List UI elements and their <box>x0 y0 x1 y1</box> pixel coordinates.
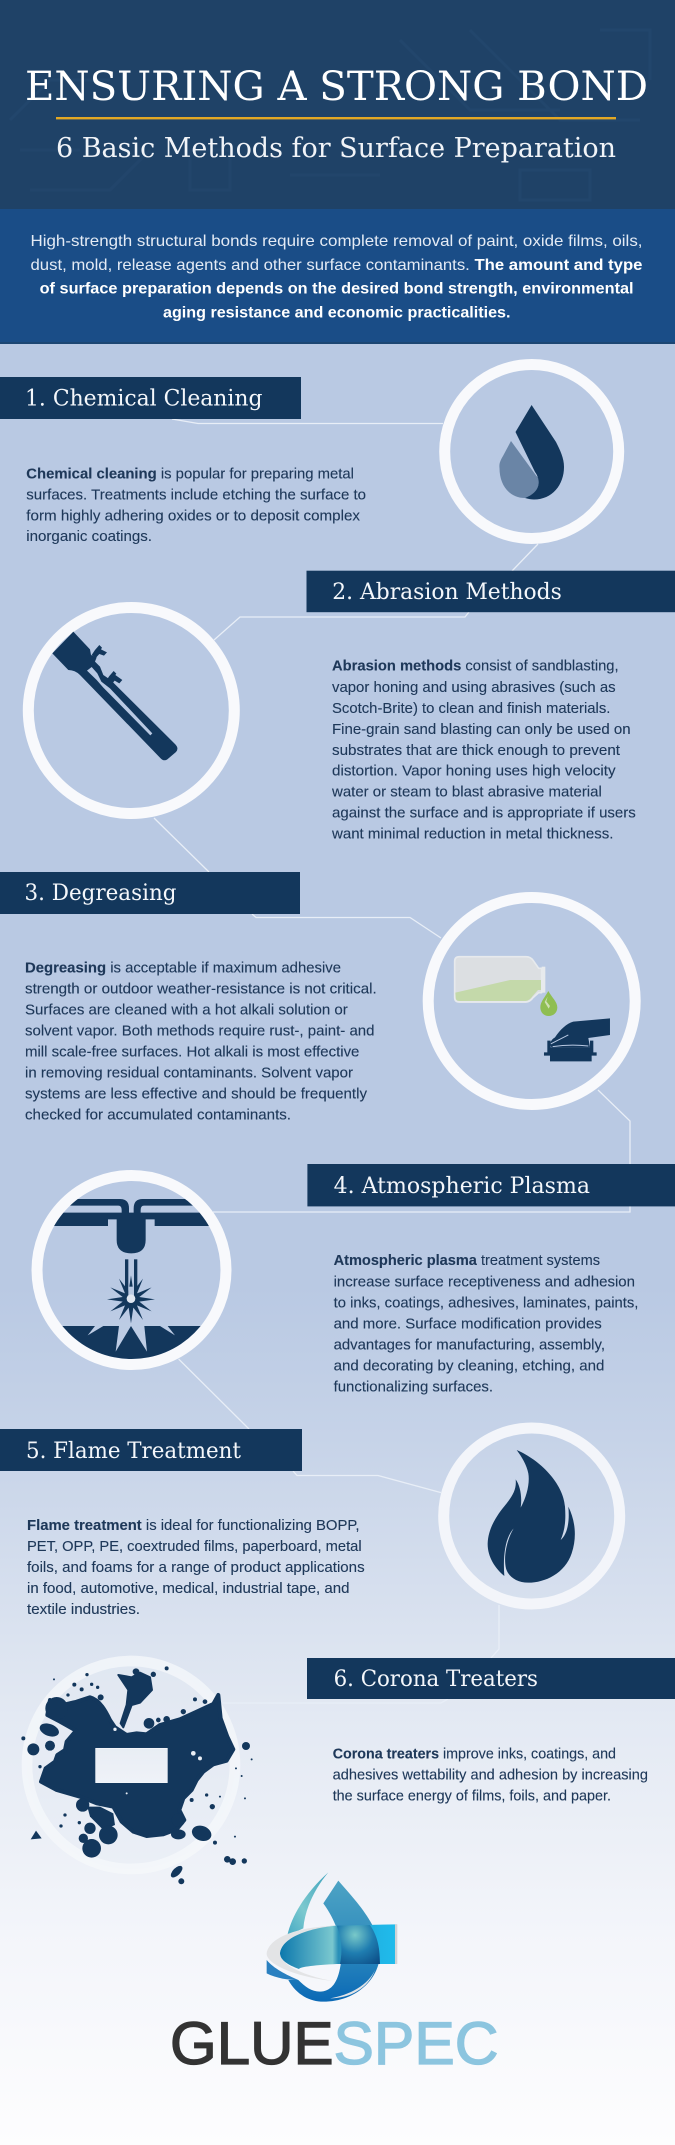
circle: atmospheric plasma <box>37 1176 226 1364</box>
body text: degreasing: systems are less effective and should be frequently <box>25 1087 368 1103</box>
section 4: atmospheric plasma <box>37 1164 675 1395</box>
header banner <box>0 0 675 209</box>
body text: flame treatment: textile industries. <box>27 1602 140 1618</box>
title: ENSURING A STRONG BOND <box>25 64 648 110</box>
section 5: flame treatment <box>0 1428 620 1618</box>
intro text <box>30 233 643 322</box>
body text: atmospheric plasma: and more. Surface modification provides <box>334 1316 602 1332</box>
body text: flame treatment: PET, OPP, PE, coextruded films, paperboard, metal <box>27 1539 362 1555</box>
logo mark <box>267 1872 397 2002</box>
body text: flame treatment: foils, and foams for a range of product applications <box>27 1560 365 1576</box>
body text: abrasion methods: substrates that are thick enough to prevent <box>332 743 620 759</box>
body text: degreasing: Surfaces are cleaned with a hot alkali solution or <box>25 1002 348 1018</box>
subtitle: 6 Basic Methods for Surface Preparation <box>56 133 616 164</box>
body text: flame treatment <box>27 1518 365 1618</box>
logo: gluespec: SPEC <box>334 2010 498 2077</box>
body text: degreasing: solvent vapor. Both methods require rust-, paint- and <box>25 1024 374 1040</box>
section 1: chemical cleaning <box>0 364 619 545</box>
heading: flame treatment: 5. Flame Treatment <box>26 1439 241 1464</box>
intro text: aging resistance and economic practicalities. <box>163 304 510 322</box>
circle: flame treatment <box>444 1428 620 1604</box>
body text: chemical cleaning <box>26 466 366 545</box>
circle: degreasing <box>428 898 635 1104</box>
connector lines <box>154 419 630 1703</box>
heading: degreasing: 3. Degreasing <box>24 881 176 906</box>
body text: abrasion methods: Scotch-Brite) to clean and finish materials. <box>332 701 610 717</box>
body text: flame treatment: in food, automotive, medical, industrial tape, and <box>27 1581 350 1597</box>
body text: corona treaters: Corona treaters improve inks, coatings, and <box>333 1746 616 1762</box>
body text: abrasion methods: want minimal reduction in metal thickness. <box>331 827 613 843</box>
body text: corona treaters: adhesives wettability and adhesion by increasing <box>333 1767 648 1783</box>
icon: sandblasting nozzle <box>52 632 177 760</box>
icon: bottle and hand wiping <box>455 957 610 1061</box>
body text: flame treatment: Flame treatment is ideal for functionalizing BOPP, <box>27 1518 360 1534</box>
body text: atmospheric plasma: functionalizing surfaces. <box>334 1379 493 1395</box>
heading: atmospheric plasma: 4. Atmospheric Plasma <box>334 1174 590 1199</box>
body text: atmospheric plasma: to inks, coatings, adhesives, laminates, paints, <box>334 1296 638 1312</box>
body text: corona treaters: the surface energy of films, foils, and paper. <box>333 1788 611 1804</box>
icon: flame <box>488 1450 575 1583</box>
body text: abrasion methods: Fine-grain sand blasting can only be used on <box>332 722 631 738</box>
body text: atmospheric plasma: increase surface receptiveness and adhesion <box>334 1274 635 1290</box>
intro band <box>0 209 675 344</box>
body text: atmospheric plasma: and decorating by cleaning, etching, and <box>334 1358 604 1374</box>
section 6: corona treaters <box>21 1658 675 1884</box>
body text: chemical cleaning: surfaces. Treatments include etching the surface to <box>26 487 366 503</box>
heading: corona treaters: 6. Corona Treaters <box>334 1667 538 1692</box>
body text: degreasing <box>25 960 377 1124</box>
body text: atmospheric plasma: Atmospheric plasma treatment systems <box>334 1253 600 1269</box>
circle: abrasion <box>28 608 234 814</box>
body text: abrasion methods: Abrasion methods consist of sandblasting, <box>332 659 619 675</box>
body text: atmospheric plasma: advantages for manufacturing, assembly, <box>334 1337 605 1353</box>
body text: atmospheric plasma <box>334 1253 638 1395</box>
body text: abrasion methods: against the surface and is appropriate if users <box>332 806 636 822</box>
logo: gluespec <box>170 1872 498 2077</box>
circle: chemical cleaning <box>445 364 619 538</box>
body text: chemical cleaning: Chemical cleaning is popular for preparing metal <box>26 466 354 482</box>
body text: abrasion methods <box>331 659 636 843</box>
section 3: degreasing <box>0 872 635 1124</box>
intro text: of surface preparation depends on the desired bond strength, environmental <box>40 280 634 298</box>
white label rectangle <box>96 1748 167 1783</box>
intro text: dust, mold, release agents and other surface contaminants. The amount and type <box>30 257 643 274</box>
heading: chemical cleaning: 1. Chemical Cleaning <box>25 386 262 412</box>
body text: chemical cleaning: form highly adhering oxides or to deposit complex <box>26 508 361 524</box>
body text: abrasion methods: distortion. Vapor honing uses high velocity <box>332 764 616 780</box>
logo wordmark: GLUE <box>170 2010 334 2077</box>
icon: liquid drop <box>499 405 564 500</box>
body text: degreasing: checked for accumulated contaminants. <box>25 1108 291 1124</box>
intro text: High-strength structural bonds require complete removal of paint, oxide films, oils, <box>30 233 642 250</box>
heading: abrasion methods: 2. Abrasion Methods <box>332 580 562 605</box>
section 2: abrasion methods <box>28 571 675 843</box>
body text: chemical cleaning: inorganic coatings. <box>26 529 152 545</box>
body text: abrasion methods: vapor honing and using abrasives (such as <box>332 680 616 696</box>
body text: degreasing: strength or outdoor weather-resistance is not critical. <box>25 982 377 998</box>
body text: degreasing: in removing residual contaminants. Solvent vapor <box>25 1066 353 1082</box>
icon: plasma nozzle <box>54 1199 209 1359</box>
body text: abrasion methods: water or steam to blast abrasive material <box>331 785 602 801</box>
icon: ink splatter in circle <box>21 1661 253 1884</box>
body text: corona treaters <box>333 1746 648 1804</box>
body text: degreasing: Degreasing is acceptable if maximum adhesive <box>25 960 341 976</box>
body text: degreasing: mill scale-free surfaces. Hot alkali is most effective <box>25 1044 359 1060</box>
